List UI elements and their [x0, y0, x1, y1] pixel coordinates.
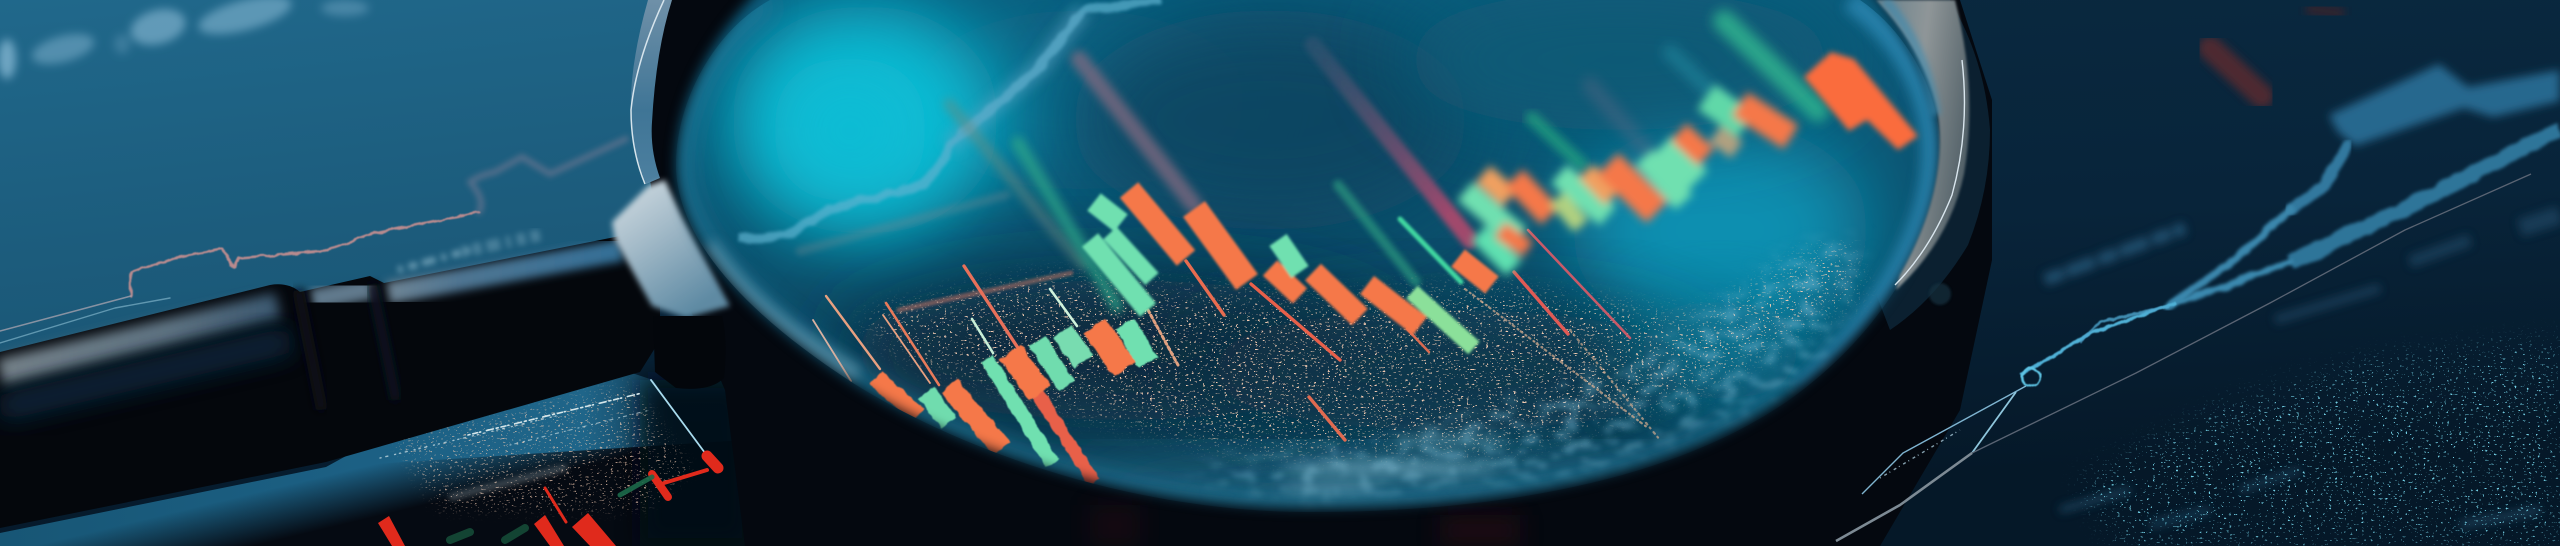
lens surface shading	[668, 0, 1940, 515]
right lens blue band	[1800, 0, 1932, 390]
icon: magnifier handle	[0, 236, 660, 528]
pale lens edge band	[676, 0, 1796, 512]
left silver rim	[631, 0, 672, 184]
magnifier frame: dark body and rims	[612, 0, 1992, 546]
right silver crescent of lens rim	[1876, 0, 1969, 305]
candlesticks right cluster (out of focus)	[1465, 97, 1791, 268]
red and green candles on lower sheet	[378, 456, 718, 546]
right-side chart lines on table	[1836, 4, 2560, 541]
upper trend line	[2291, 146, 2346, 209]
handle highlights	[0, 305, 278, 372]
small faded labels on sheet	[398, 235, 540, 270]
panel: lower-left chart sheet under handle	[0, 360, 750, 546]
large orange candle at top right of lens	[1804, 52, 1918, 150]
blurred blue trend line in lens	[738, 0, 1160, 238]
candlesticks upper cluster	[1090, 190, 1492, 348]
candlesticks left cluster (sharp)	[876, 324, 1148, 482]
dark right rim	[1840, 0, 1990, 330]
scattered cyan data points on table	[2068, 326, 2560, 546]
looped chart knot	[2022, 368, 2040, 386]
small screw on rim	[1929, 283, 1951, 305]
line chart on sheet	[0, 139, 626, 343]
lower trend line	[2290, 129, 2560, 262]
background streaks in lens	[800, 21, 1818, 310]
magnifier lens glass	[668, 0, 1940, 515]
thin wicks in lens	[813, 230, 1660, 440]
blurred blue block top of line	[2329, 64, 2560, 146]
handle bracket	[612, 180, 730, 389]
dim blurred row labels	[2045, 215, 2560, 525]
sparkle data points in lens	[852, 240, 1875, 470]
panel: upper-left blue chart sheet	[0, 0, 680, 372]
blurred axis labels	[0, 0, 369, 79]
blurred red candle	[2210, 48, 2262, 96]
data specks on lower sheet	[392, 378, 694, 519]
thin converging lines	[1862, 386, 2026, 494]
bottom blurred data cloud	[1210, 242, 1861, 502]
